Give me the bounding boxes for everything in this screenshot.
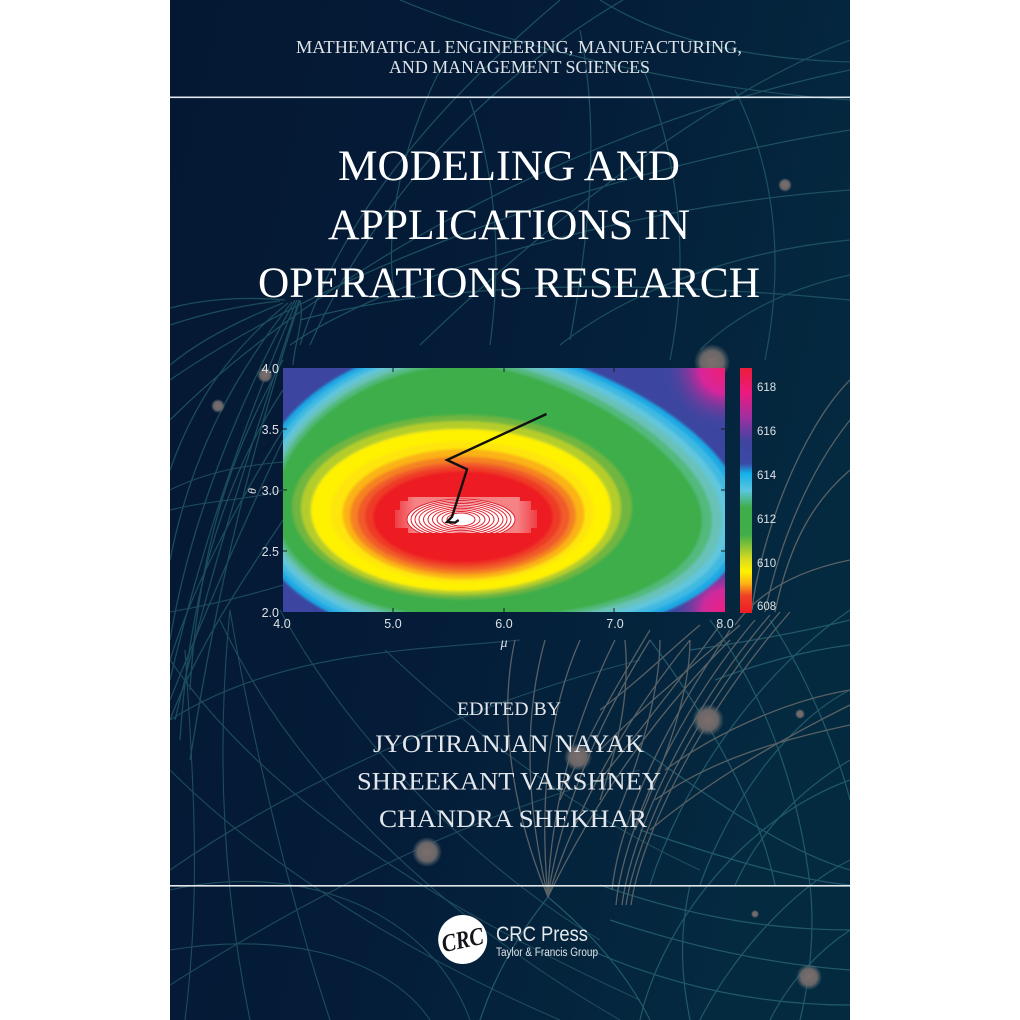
upper fan from waist — [508, 640, 548, 897]
editor names: CHANDRA SHEKHAR — [379, 804, 647, 833]
colour bar labels: 612 — [757, 514, 776, 526]
colour bar labels: 616 — [757, 426, 776, 438]
top divider rule — [170, 96, 850, 98]
cover background — [170, 0, 850, 1020]
x axis labels: 4.0 — [273, 617, 291, 631]
contour chart — [245, 343, 777, 651]
book cover — [170, 0, 850, 1020]
x axis labels: 8.0 — [716, 617, 734, 631]
publisher group: Taylor & Francis Group — [496, 947, 598, 959]
y axis title: θ — [245, 488, 259, 494]
icon: CRC circle — [438, 915, 487, 964]
optimisation path — [447, 414, 546, 523]
y axis labels — [262, 362, 279, 620]
y axis labels: 3.0 — [262, 484, 279, 498]
y axis labels: 3.5 — [262, 423, 279, 437]
publisher name: CRC Press — [496, 923, 588, 946]
book title: APPLICATIONS IN — [328, 202, 690, 249]
colour bar labels: 614 — [757, 470, 777, 482]
publisher logo — [438, 915, 598, 964]
series title: AND MANAGEMENT SCIENCES — [389, 57, 650, 77]
edited by label: EDITED BY — [457, 699, 561, 720]
x axis title: μ — [499, 636, 508, 651]
background glowing dots — [211, 178, 822, 990]
colour bar labels: 618 — [757, 382, 776, 394]
editor names: SHREEKANT VARSHNEY — [357, 766, 661, 796]
book title — [258, 143, 760, 307]
axis ticks — [283, 368, 725, 612]
colour bar labels: 608 — [757, 601, 776, 613]
colour bar labels: 610 — [757, 558, 776, 570]
y axis labels: 2.5 — [262, 545, 279, 559]
colour bar — [740, 368, 752, 613]
right side cords — [650, 705, 850, 830]
series title — [296, 37, 742, 77]
icon: CRC circle: CRC — [439, 923, 486, 958]
editor names: JYOTIRANJAN NAYAK — [373, 729, 645, 758]
background network lines — [170, 0, 850, 1020]
white contour rings — [395, 497, 537, 533]
plot area: contour surface — [283, 368, 725, 612]
x axis labels: 7.0 — [606, 617, 624, 631]
x axis labels — [273, 617, 734, 631]
series title: MATHEMATICAL ENGINEERING, MANUFACTURING, — [296, 37, 742, 57]
crossing lines — [560, 630, 650, 800]
right bundle — [622, 615, 770, 905]
book title: OPERATIONS RESEARCH — [258, 260, 760, 307]
book title: MODELING AND — [338, 143, 680, 190]
x axis labels: 5.0 — [384, 617, 402, 631]
y axis labels: 4.0 — [262, 362, 279, 376]
editor names — [357, 729, 661, 833]
x axis labels: 6.0 — [495, 617, 513, 631]
editors — [357, 699, 661, 833]
colour bar labels — [757, 382, 777, 613]
bottom divider rule — [170, 885, 850, 887]
y axis labels: 2.0 — [262, 606, 279, 620]
